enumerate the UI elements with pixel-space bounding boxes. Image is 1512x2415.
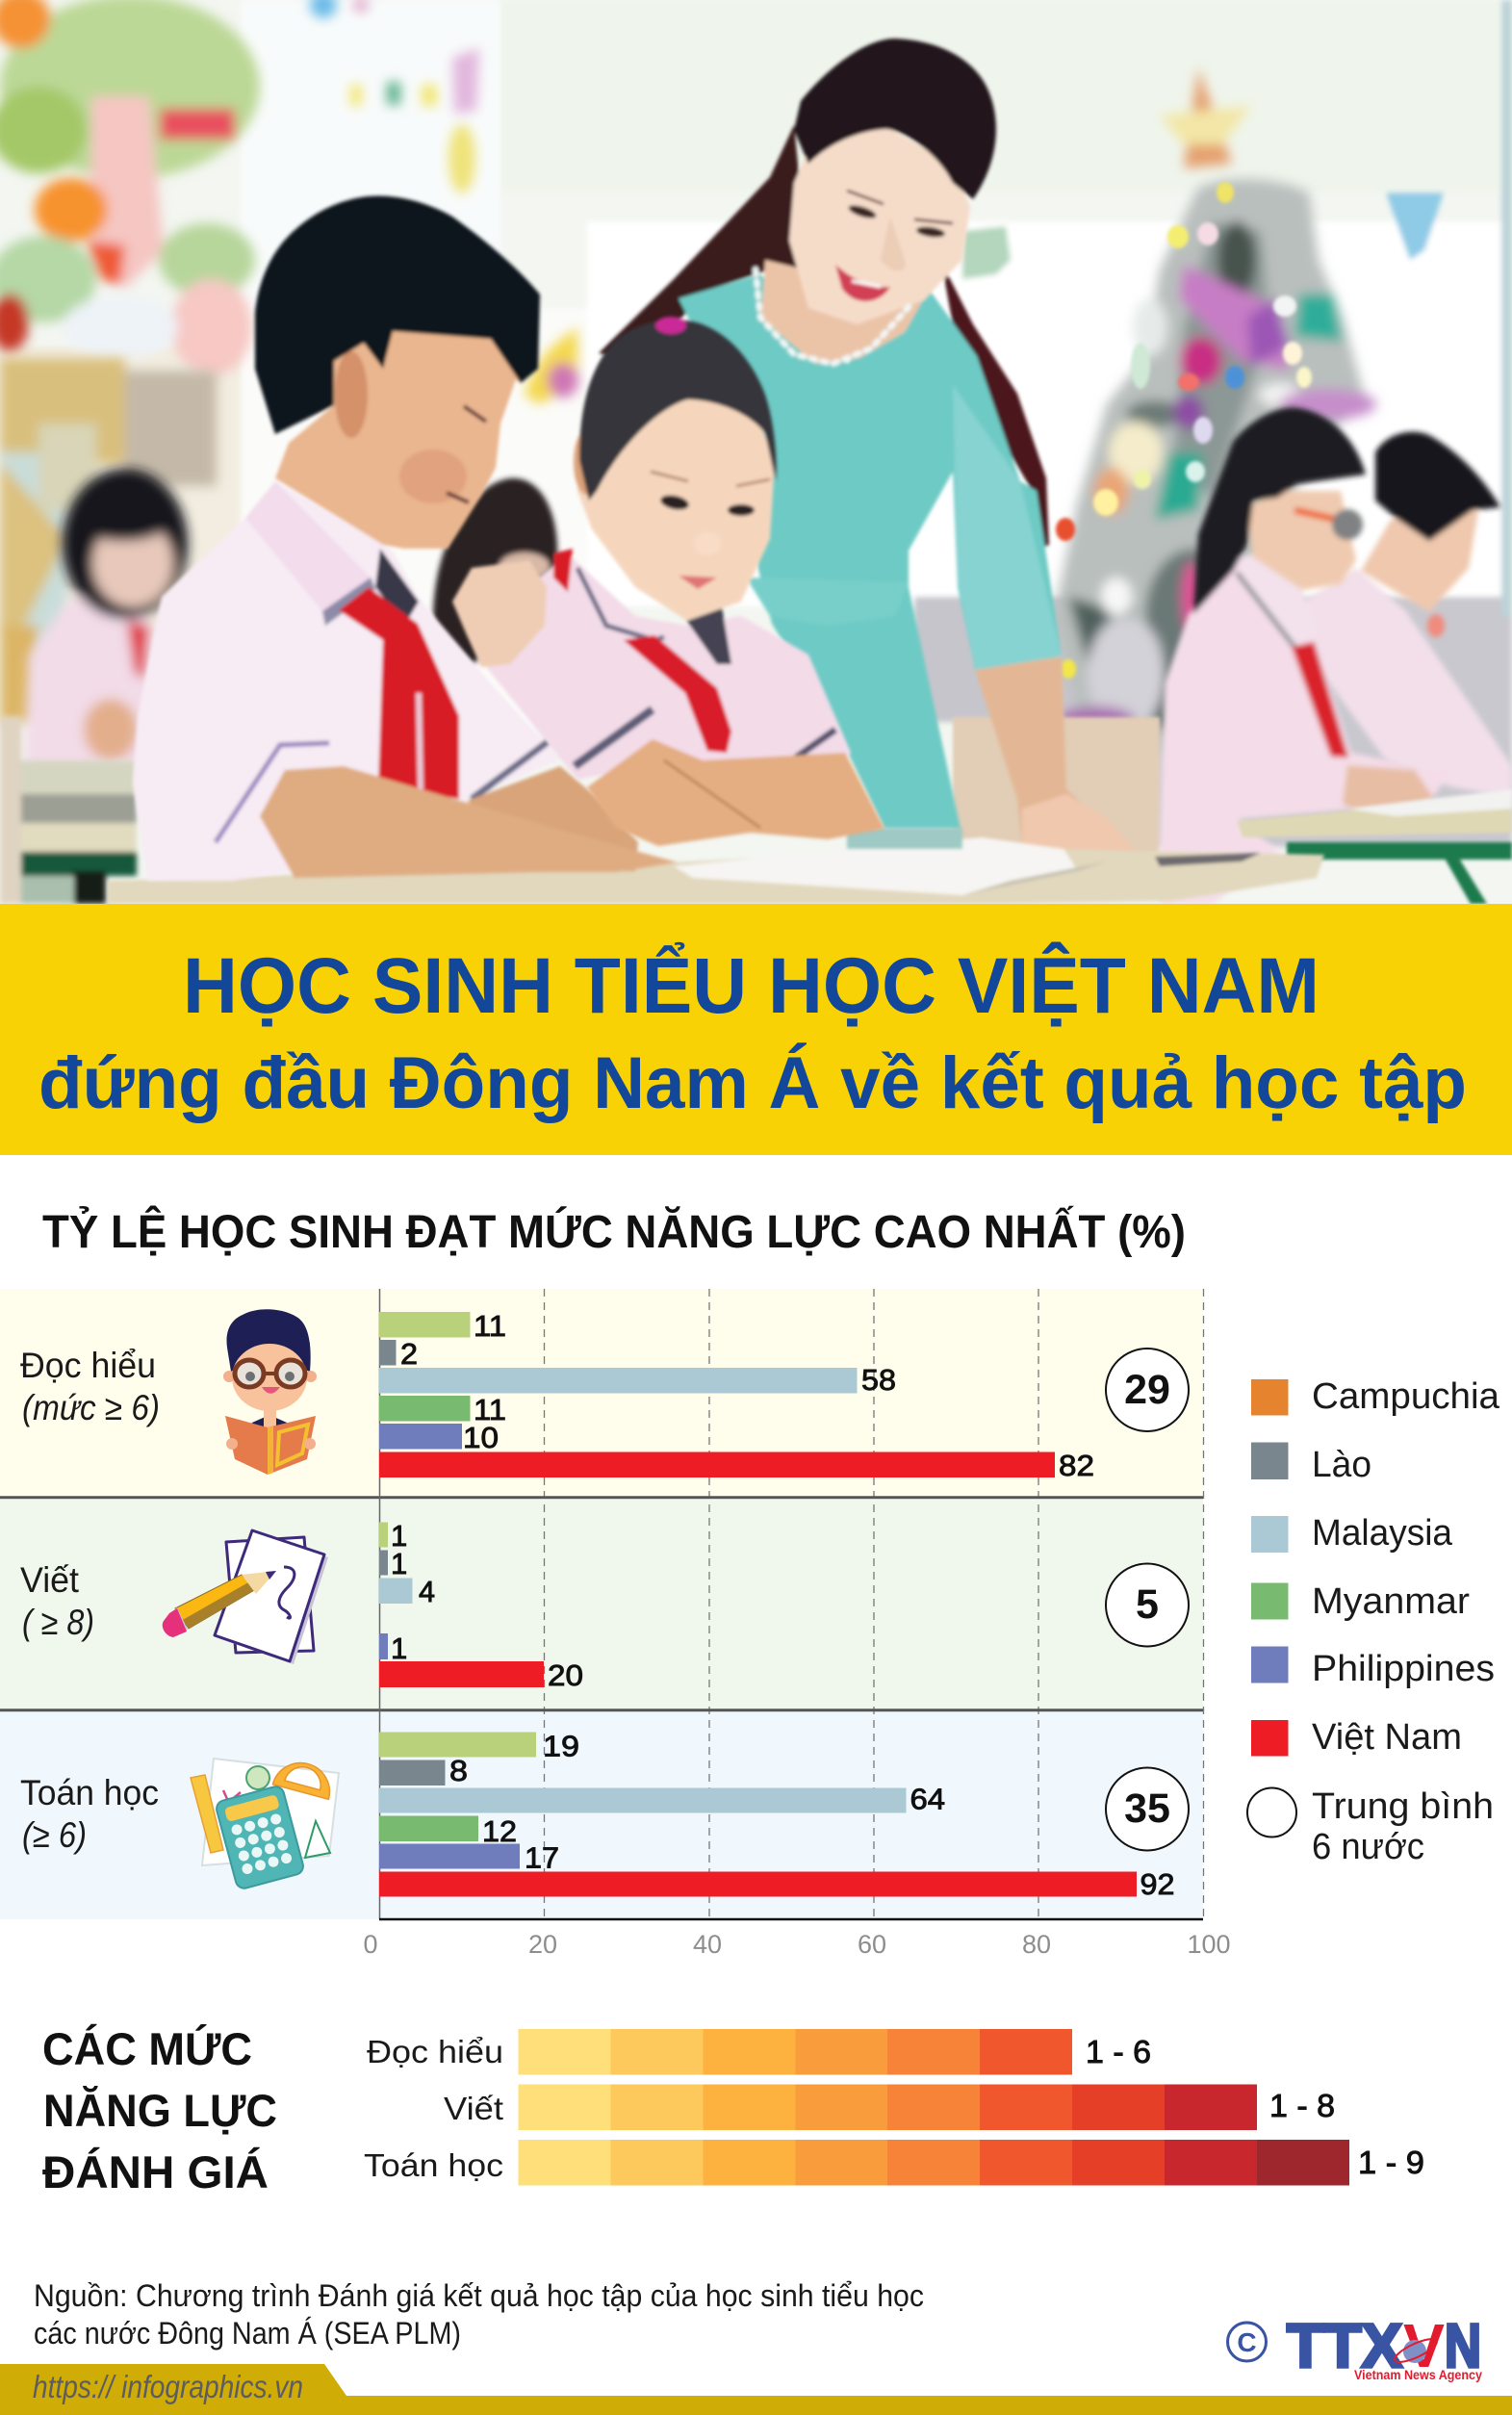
bars: writing: 1 xyxy=(391,1631,407,1665)
panel: reading background xyxy=(0,1289,1203,1496)
label: reading: Đọc hiểu xyxy=(20,1346,156,1385)
icon: pencil and paper xyxy=(163,1530,328,1664)
title line 2: đứng đầu Đông Nam Á về kết quả học tập xyxy=(38,1042,1467,1124)
boy red scarf xyxy=(339,587,459,799)
label: writing: ( ≥ 8) xyxy=(22,1603,94,1642)
legend: Việt Nam xyxy=(1312,1717,1462,1758)
girl eyes and mouth xyxy=(659,493,690,512)
bars: math xyxy=(379,1729,1174,1901)
bars: reading: 2 xyxy=(400,1337,418,1371)
teacher hair xyxy=(794,39,996,199)
teacher hand on shoulder xyxy=(452,560,547,667)
blurred girl on the far left xyxy=(24,469,188,770)
heading: competency levels: ĐÁNH GIÁ xyxy=(42,2146,269,2197)
logo: TTXVN Vietnam News Agency xyxy=(1228,2311,1482,2382)
girl student xyxy=(452,317,884,846)
main desk and open book xyxy=(108,828,1324,904)
right boy xyxy=(1280,432,1512,799)
legend: Philippines xyxy=(1312,1649,1495,1689)
bars: math: 92 xyxy=(1140,1867,1174,1901)
legend: Trung bình xyxy=(1312,1786,1494,1827)
bars: math: 8 xyxy=(449,1754,468,1787)
right girl xyxy=(1160,407,1449,904)
axis labels: 100 xyxy=(1187,1930,1231,1959)
axis labels: 0 xyxy=(363,1930,378,1959)
right desk xyxy=(1238,789,1512,904)
source note: Nguồn: Chương trình Đánh giá kết quả học tập của học sinh tiểu học xyxy=(34,2278,924,2313)
source note: các nước Đông Nam Á (SEA PLM) xyxy=(34,2316,461,2351)
heading: competency levels: NĂNG LỰC xyxy=(43,2085,277,2136)
chart heading: TỶ LỆ HỌC SINH ĐẠT MỨC NĂNG LỰC CAO NHẤT (%) xyxy=(42,1205,1186,1258)
legend: Malaysia xyxy=(1312,1513,1453,1554)
level scale: reading 1-6: Đọc hiểu xyxy=(367,2034,503,2069)
level scale: math 1-9: Toán học xyxy=(364,2147,503,2183)
bars: reading: 82 xyxy=(1059,1449,1094,1482)
photo: teacher and students in classroom xyxy=(0,0,1512,904)
girl crossed arms xyxy=(587,739,884,846)
girl shirt xyxy=(481,553,851,780)
label: writing: Viết xyxy=(20,1560,80,1600)
girl hair xyxy=(579,320,777,501)
protractor xyxy=(272,1757,336,1799)
bars: reading: 11 xyxy=(474,1309,506,1343)
bars: writing: 4 xyxy=(419,1575,435,1608)
Christmas tree lights xyxy=(1056,182,1312,679)
bars: math: 19 xyxy=(543,1729,579,1763)
label: writing xyxy=(20,1560,94,1642)
panel: writing background xyxy=(0,1500,1203,1708)
desk with items on the left xyxy=(0,717,137,904)
logo: TTXVN Vietnam News Agency: V xyxy=(1403,2311,1445,2380)
heading: competency levels xyxy=(42,2023,277,2197)
teacher neck xyxy=(761,260,924,364)
bars: math: 17 xyxy=(525,1840,559,1875)
average circle: writing 5: 5 xyxy=(1136,1581,1159,1628)
bars: reading: 10 xyxy=(463,1421,499,1454)
girl face xyxy=(577,380,775,621)
logo: TTXVN Vietnam News Agency: N xyxy=(1445,2311,1481,2380)
icon: calculator and math tools xyxy=(191,1757,339,1890)
teacher face xyxy=(789,116,970,324)
boy shirt xyxy=(133,481,560,881)
label: reading xyxy=(20,1346,160,1427)
logo: TTXVN Vietnam News Agency: C xyxy=(1237,2327,1257,2357)
boy sleeve trim xyxy=(216,743,329,842)
logo: TTXVN Vietnam News Agency: TTX xyxy=(1287,2311,1402,2380)
boy hair xyxy=(255,196,540,434)
teacher xyxy=(599,39,1140,865)
classroom background wall and window xyxy=(0,0,1512,847)
label: math: Toán học xyxy=(20,1773,159,1812)
axis labels: 40 xyxy=(693,1930,722,1959)
bars: reading: 11 xyxy=(474,1393,506,1426)
footer gold bar and tab xyxy=(0,2364,1512,2415)
cabinet behind the teacher xyxy=(953,717,1160,861)
blurred Christmas tree xyxy=(1054,67,1376,751)
wall painting of a tree xyxy=(0,0,578,404)
girl red scarf xyxy=(553,549,573,592)
girl collar knot xyxy=(683,606,731,664)
pearl necklace xyxy=(756,270,910,364)
average circle: math 35: 35 xyxy=(1124,1786,1170,1832)
bars: reading xyxy=(379,1309,1094,1482)
average circle: math 35 xyxy=(1106,1767,1189,1850)
bars: writing: 1 xyxy=(391,1547,407,1580)
label: math xyxy=(20,1773,159,1855)
boy arms xyxy=(467,766,638,871)
legend: Campuchia xyxy=(1312,1376,1500,1417)
label: reading: (mức ≥ 6) xyxy=(22,1388,160,1427)
bars: writing: 20 xyxy=(548,1658,583,1692)
bars: reading: 58 xyxy=(861,1363,896,1397)
title line 1: HỌC SINH TIỂU HỌC VIỆT NAM xyxy=(183,942,1320,1030)
legend xyxy=(1247,1376,1500,1867)
legend: Myanmar xyxy=(1312,1581,1470,1622)
axis labels: 80 xyxy=(1022,1930,1051,1959)
teacher long hair right xyxy=(941,262,1049,551)
bars: math: 64 xyxy=(910,1783,945,1815)
boy eye and mouth xyxy=(447,406,486,502)
legend: Lào xyxy=(1312,1445,1371,1485)
average circle: reading 29: 29 xyxy=(1124,1367,1170,1413)
teacher arm xyxy=(975,656,1140,865)
boy neck and face xyxy=(275,327,521,549)
yellow title band xyxy=(0,904,1512,1155)
icon: boy reading a book xyxy=(223,1309,317,1475)
footer url: https:// infographics.vn xyxy=(33,2369,303,2404)
teacher eyes, brows and lips xyxy=(847,203,878,220)
bars: writing: 1 xyxy=(391,1519,407,1553)
level scale: writing 1-8: Viết xyxy=(444,2091,503,2126)
blurred girl behind the boy xyxy=(433,478,557,664)
teacher long hair left xyxy=(599,125,804,361)
average circle: writing 5 xyxy=(1106,1563,1189,1646)
average circle: reading 29 xyxy=(1106,1349,1189,1431)
blurred shelf on the left xyxy=(0,358,217,722)
level scale: writing 1-8: 1 - 8 xyxy=(1269,2088,1335,2123)
panel: math background xyxy=(0,1711,1203,1919)
axis labels xyxy=(363,1930,1231,1959)
heading: competency levels: CÁC MỨC xyxy=(42,2023,252,2074)
level scale: writing 1-8 xyxy=(444,2085,1335,2130)
source note xyxy=(34,2278,924,2351)
level scale: math 1-9 xyxy=(364,2140,1424,2185)
bars: writing xyxy=(379,1519,583,1692)
axis labels: 60 xyxy=(858,1930,886,1959)
level scale: math 1-9: 1 - 9 xyxy=(1358,2145,1424,2180)
axis labels: 20 xyxy=(528,1930,557,1959)
teacher ao dai dress xyxy=(679,274,1062,829)
label: math: (≥ 6) xyxy=(22,1815,87,1855)
legend: 6 nước xyxy=(1312,1827,1424,1867)
level scale: reading 1-6 xyxy=(367,2029,1151,2075)
level scale: reading 1-6: 1 - 6 xyxy=(1086,2034,1151,2069)
bars: math: 12 xyxy=(482,1814,517,1848)
logo: TTXVN Vietnam News Agency: Vietnam News Agency xyxy=(1354,2367,1482,2382)
boy student xyxy=(133,196,678,881)
